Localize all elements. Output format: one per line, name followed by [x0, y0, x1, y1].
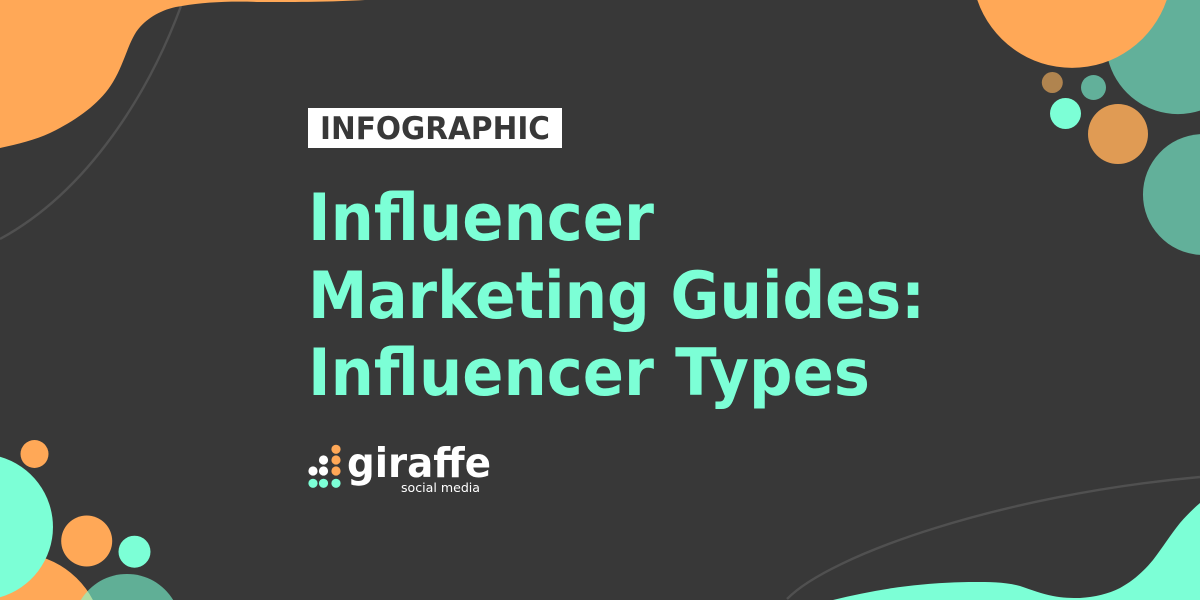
logo: giraffe social media	[308, 439, 491, 495]
title	[308, 181, 925, 411]
curved line: bottom right	[787, 477, 1200, 599]
logo icon: dots	[308, 445, 341, 488]
title: Marketing Guides:	[308, 259, 925, 334]
blob: top left orange	[0, 0, 365, 148]
logo tagline: social media	[401, 481, 480, 495]
curved line: top left	[0, 6, 181, 239]
blob: bottom right mint	[833, 503, 1200, 600]
title: Influencer	[308, 181, 654, 256]
logo wordmark: giraffe	[347, 439, 491, 487]
title: Influencer Types	[308, 336, 870, 411]
tag: INFOGRAPHIC: INFOGRAPHIC	[320, 111, 550, 147]
circles: top right cluster	[977, 0, 1200, 255]
circles: bottom left cluster	[0, 440, 173, 600]
